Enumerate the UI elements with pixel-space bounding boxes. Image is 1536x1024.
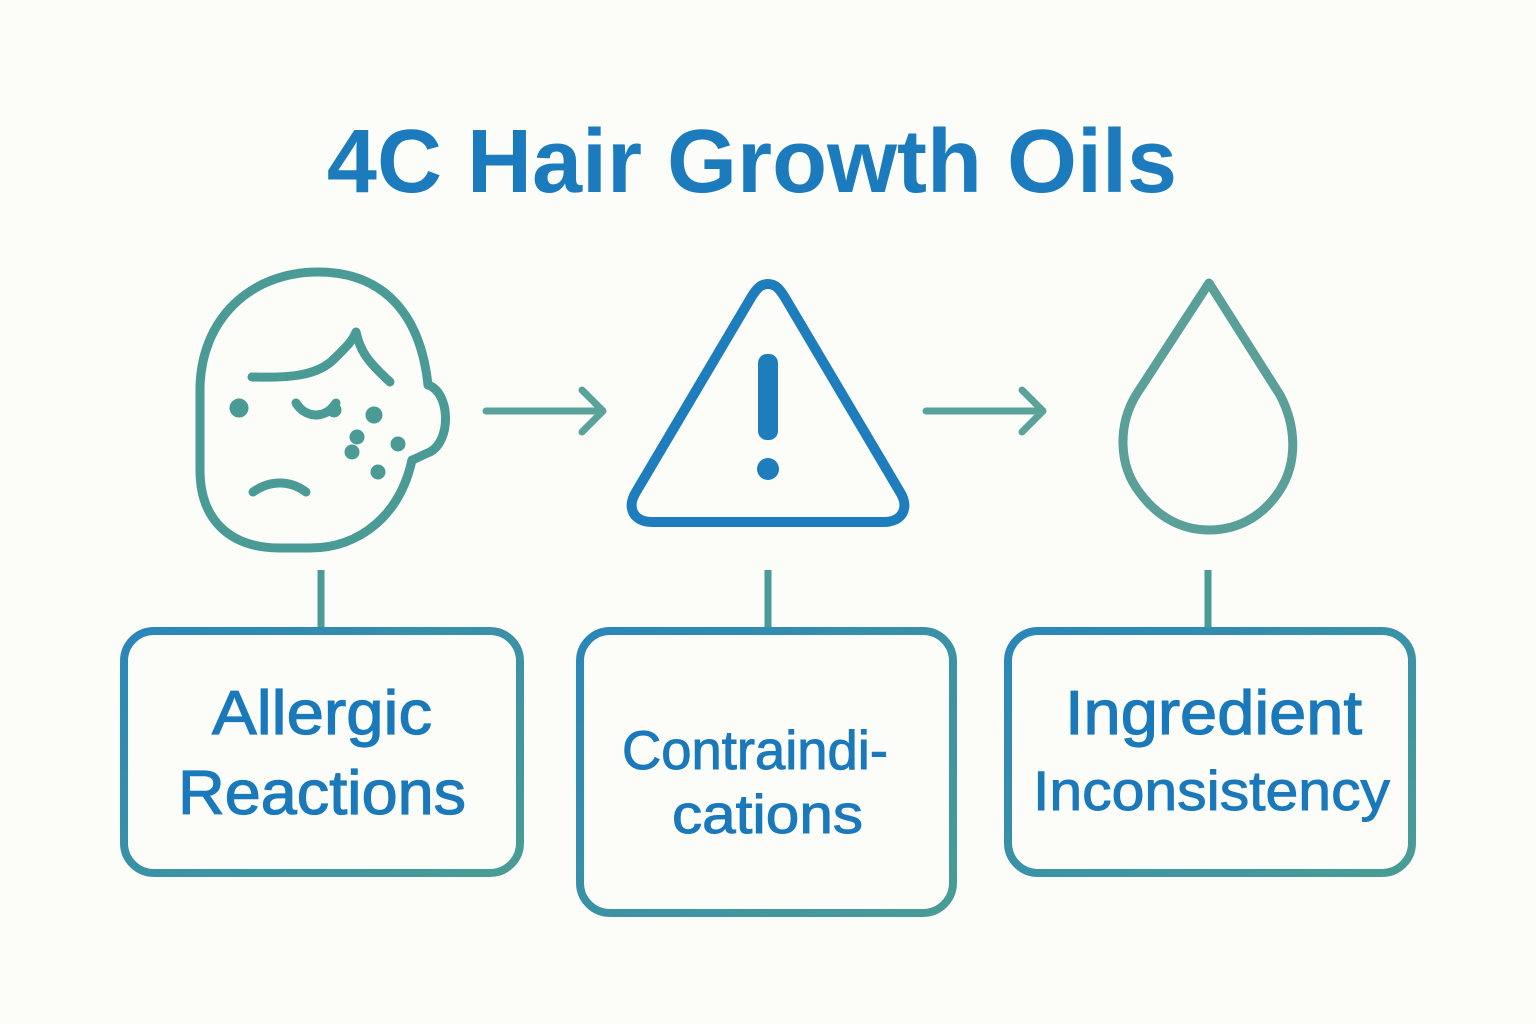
icon: face with rash [200,272,446,548]
icon: warning triangle [632,284,904,522]
panel: allergic reactions [124,631,520,873]
panel: ingredient inconsistency: Ingredient [1065,679,1362,748]
panel: contraindications [580,631,953,913]
arrow 2 [926,390,1043,432]
arrow 1 [486,390,603,432]
panel: allergic reactions: Allergic [212,679,432,748]
connectors [321,570,1208,630]
icon: oil drop [1123,283,1293,530]
panel: contraindications: Contraindi- [622,719,888,781]
panel: ingredient inconsistency [1008,631,1412,873]
panel: ingredient inconsistency: Inconsistency [1033,759,1390,822]
title: 4C Hair Growth Oils [327,112,1177,212]
panel: contraindications: cations [672,783,863,845]
panel: allergic reactions: Reactions [178,759,466,828]
